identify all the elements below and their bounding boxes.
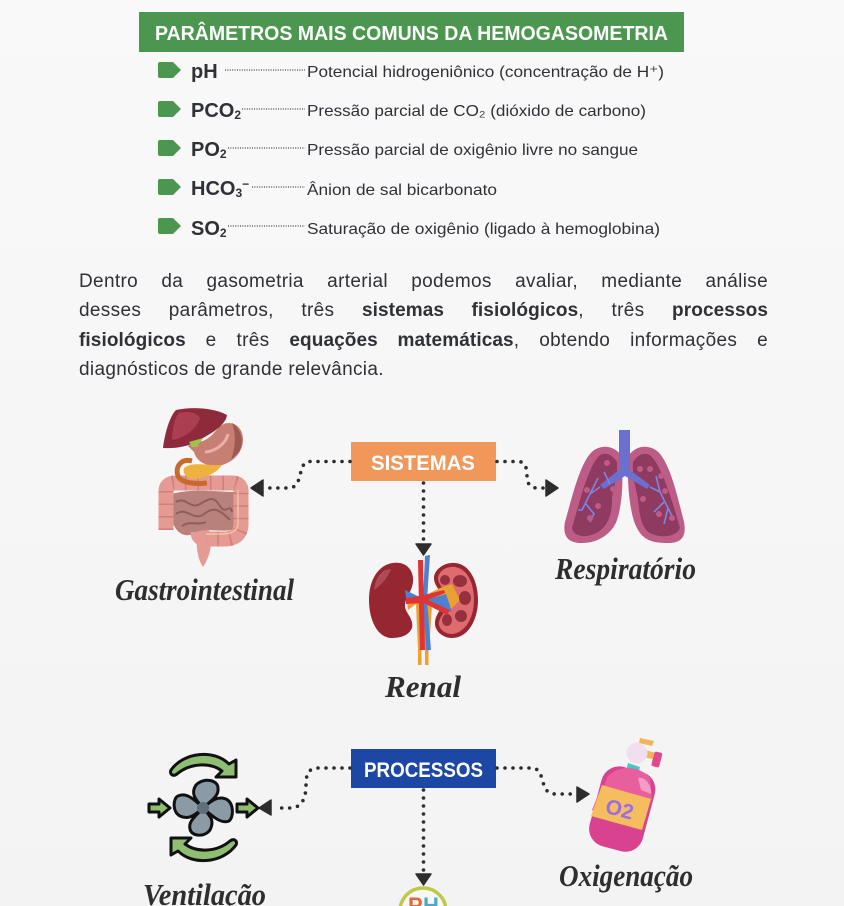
label: respiratorio: Respiratório xyxy=(554,551,696,586)
label: gastrointestinal: Gastrointestinal xyxy=(115,572,294,607)
label band xyxy=(591,785,651,830)
title banner xyxy=(139,12,684,52)
label: oxigenacao: Oxigenação xyxy=(559,858,693,893)
medulla xyxy=(440,575,471,626)
parameter: HCO3: − xyxy=(242,177,249,191)
arrow: sistemas to respiratorio xyxy=(497,462,558,496)
left kidney xyxy=(369,563,413,638)
highlight xyxy=(638,778,651,794)
parameter: PCO2 xyxy=(158,100,646,122)
icon: oxygen cylinder xyxy=(585,738,663,856)
arrow: processos to ventilacao xyxy=(259,768,350,815)
parameter: HCO3: HCO xyxy=(191,178,235,200)
parameter: SO2: 2 xyxy=(220,226,227,240)
parameter: PO2: PO xyxy=(191,139,220,161)
parameter list xyxy=(158,61,664,240)
parameter: SO2 xyxy=(158,218,660,240)
parameter: PO2: Pressão parcial de oxigênio livre no sangue xyxy=(307,142,638,159)
rectum xyxy=(197,527,211,567)
right arrow xyxy=(237,799,258,817)
icon: pH circle xyxy=(400,888,446,906)
duodenum xyxy=(177,460,207,483)
top arrow xyxy=(170,754,236,777)
icon: lungs xyxy=(564,430,685,543)
icon: kidneys xyxy=(369,555,478,665)
parameter: SO2: Saturação de oxigênio (ligado à hemoglobina) xyxy=(307,221,660,238)
left lung xyxy=(564,447,622,543)
box: sistemas: SISTEMAS xyxy=(371,452,475,475)
parameter: pH: pH xyxy=(191,61,218,83)
parameter: PO2 xyxy=(158,139,638,161)
intro paragraph xyxy=(79,271,768,380)
arrow: sistemas to gastrointestinal xyxy=(251,462,350,496)
intro paragraph: desses parâmetros, três sistemas fisiológicos, três processos xyxy=(79,300,768,321)
intro paragraph: diagnósticos de grande relevância. xyxy=(79,359,384,380)
parameter: SO2: SO xyxy=(191,218,220,240)
left arrow xyxy=(149,799,170,817)
arrow: processos to oxigenacao xyxy=(497,768,589,802)
right kidney xyxy=(434,563,478,638)
label: renal: Renal xyxy=(384,669,461,704)
arrow: processos to ph xyxy=(416,790,431,885)
o2 mark: O2 xyxy=(603,795,636,825)
liver xyxy=(163,408,227,448)
vena cava xyxy=(423,555,431,650)
stomach xyxy=(188,423,243,466)
renal pelvis xyxy=(406,584,460,650)
intro paragraph: Dentro da gasometria arterial podemos avaliar, mediante análise xyxy=(79,271,768,292)
box: processos xyxy=(351,749,496,788)
parameter: HCO3: 3 xyxy=(235,186,242,200)
parameter: PCO2: PCO xyxy=(191,100,234,122)
title banner: PARÂMETROS MAIS COMUNS DA HEMOGASOMETRIA xyxy=(155,21,668,45)
aorta xyxy=(418,560,425,650)
gallbladder xyxy=(189,438,203,447)
parameter: PCO2: Pressão parcial de CO₂ (dióxido de carbono) xyxy=(307,103,646,120)
bottom arrow xyxy=(171,838,237,861)
parameter: HCO3 xyxy=(158,177,497,200)
parameter: pH xyxy=(158,61,664,83)
alveoli xyxy=(584,460,675,521)
right lung xyxy=(628,447,685,543)
valve xyxy=(626,763,640,775)
arrow: sistemas to renal xyxy=(416,483,431,555)
icon: digestive organs xyxy=(163,408,243,567)
colon xyxy=(166,483,241,539)
parameter: PO2: 2 xyxy=(220,147,227,161)
icon: fan xyxy=(149,754,258,861)
box: sistemas xyxy=(351,442,496,481)
box: processos: PROCESSOS xyxy=(364,759,483,782)
parameter: PCO2: 2 xyxy=(234,108,241,122)
intro paragraph: fisiológicos e três equações matemáticas, obtendo informações e xyxy=(79,330,768,351)
airways xyxy=(600,430,650,489)
cylinder body xyxy=(585,762,659,856)
fan blades xyxy=(194,780,218,808)
parameter: pH: Potencial hidrogeniônico (concentração de H⁺) xyxy=(307,64,664,81)
pancreas xyxy=(184,464,222,479)
parameter: HCO3: Ânion de sal bicarbonato xyxy=(307,180,497,199)
small intestine xyxy=(172,491,237,535)
